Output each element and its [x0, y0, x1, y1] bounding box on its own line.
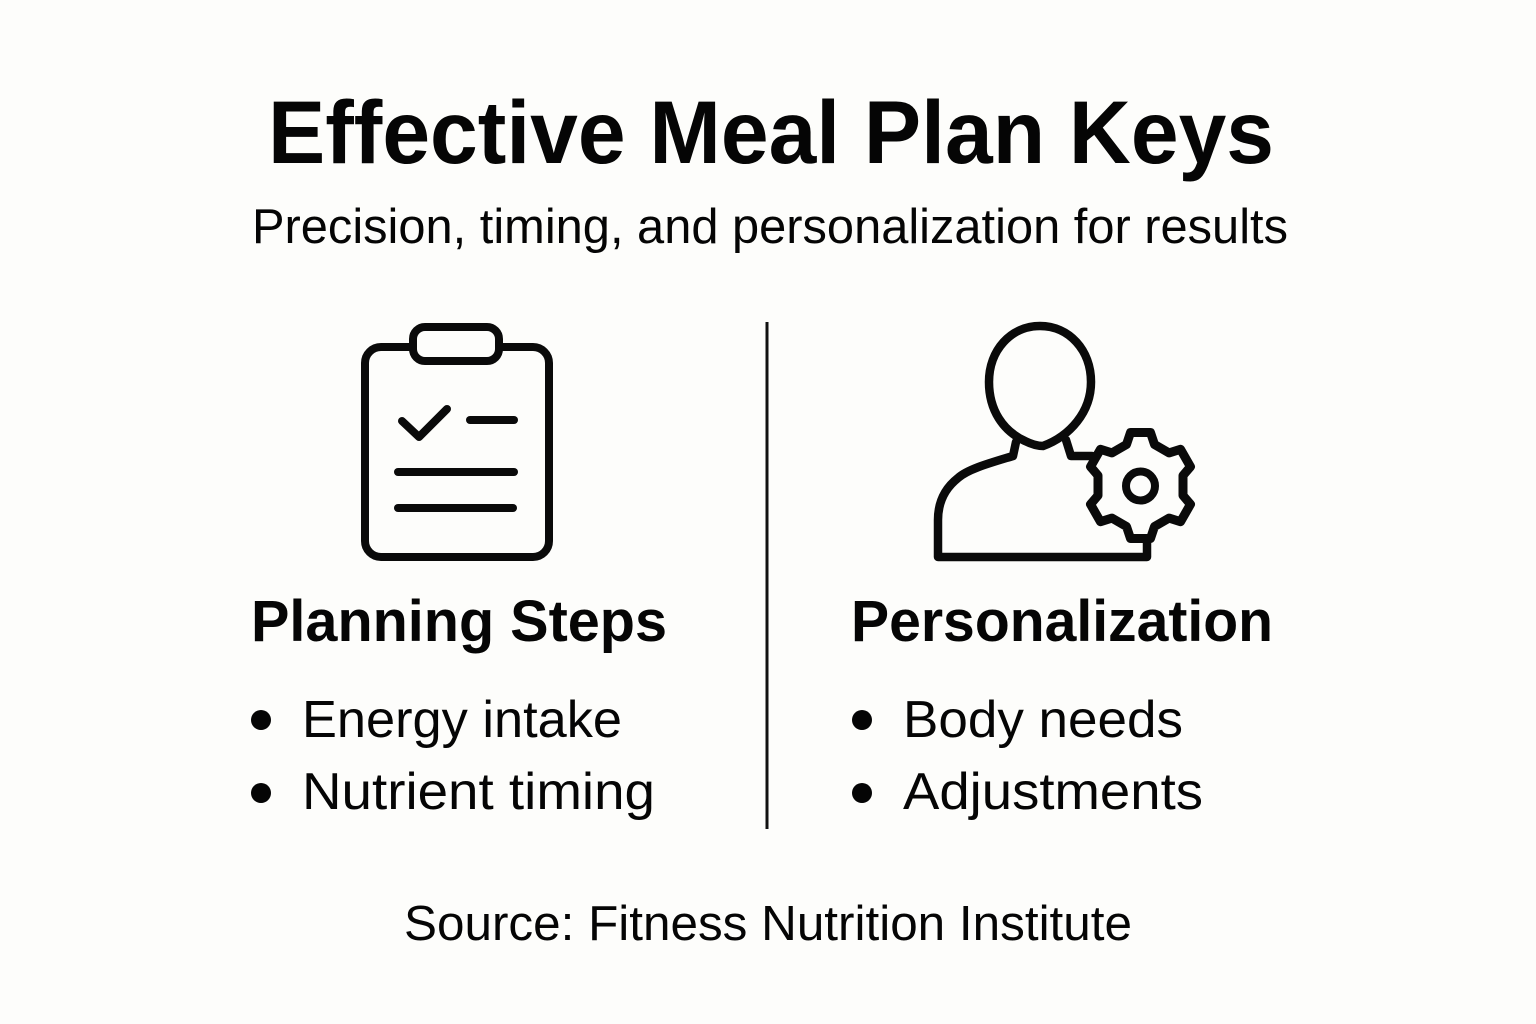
icon: clipboard checklist — [365, 327, 549, 557]
title: Effective Meal Plan Keys — [268, 82, 1274, 182]
source: Source: Fitness Nutrition Institute — [404, 896, 1132, 951]
divider — [766, 322, 768, 829]
list: personalization: Body needs — [903, 690, 1183, 748]
heading: Planning Steps: Planning Steps — [251, 589, 667, 654]
list: personalization: Adjustments — [903, 762, 1203, 820]
icon: person with gear — [938, 326, 1190, 557]
heading: Personalization: Personalization — [851, 589, 1273, 654]
subtitle: Precision, timing, and personalization for results — [252, 199, 1288, 254]
list: planning steps: Energy intake — [302, 690, 622, 748]
list: planning steps — [251, 690, 655, 820]
list: planning steps: Nutrient timing — [302, 762, 655, 820]
list: personalization — [852, 690, 1203, 820]
